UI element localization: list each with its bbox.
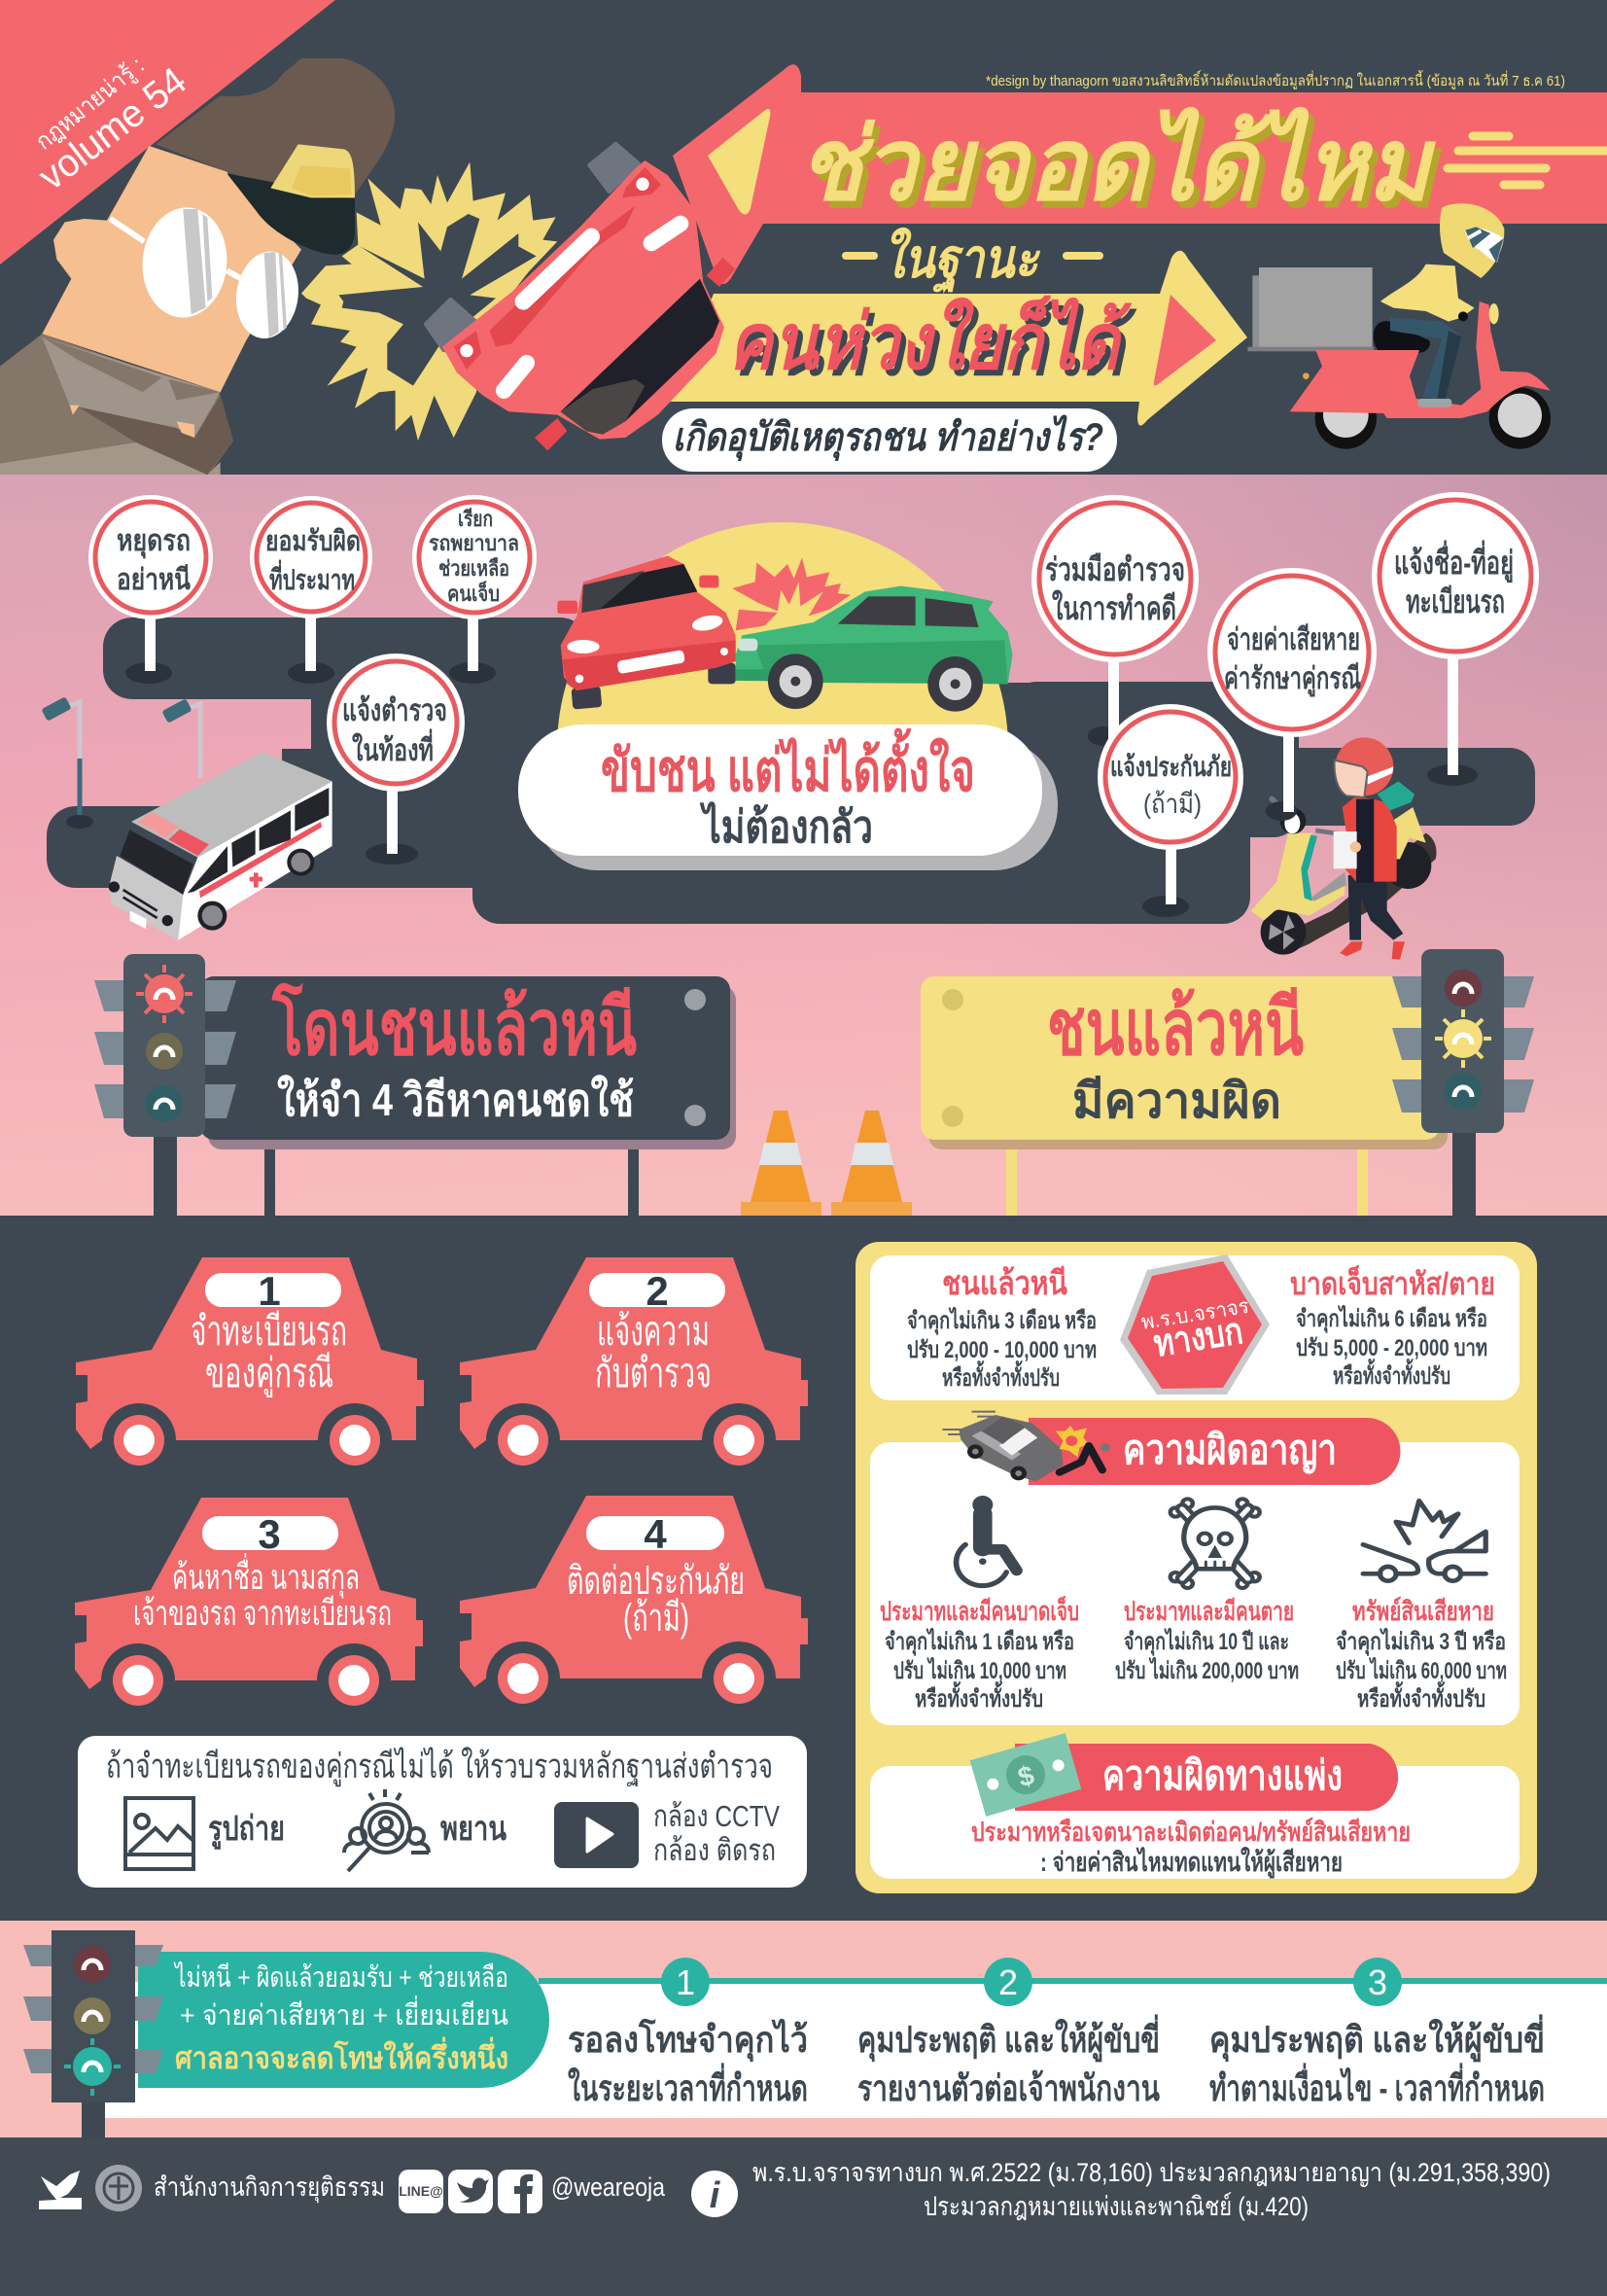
car card 2 bbox=[460, 1257, 808, 1466]
title line 1: ช่วยจอดได้ไหม bbox=[798, 106, 1436, 222]
banner: civil offence: ความผิดทางแพ่ง bbox=[1102, 1752, 1343, 1798]
column: injured: จำคุกไม่เกิน 1 เดือน หรือ bbox=[885, 1627, 1074, 1657]
step 2: รายงานตัวต่อเจ้าพนักงาน bbox=[857, 2068, 1160, 2108]
signboard: hit and run is wrong bbox=[921, 976, 1448, 1216]
hexagon sign bbox=[1120, 1254, 1270, 1395]
evidence box bbox=[78, 1736, 807, 1888]
label: cameras: กล้อง CCTV bbox=[653, 1799, 780, 1833]
signpost: notify local police bbox=[327, 653, 465, 865]
signboard: hit and fled from you bbox=[200, 976, 736, 1216]
signpost: stop do not flee: หยุดรถ bbox=[117, 525, 191, 559]
panel: land traffic act: ชนแล้วหนี bbox=[942, 1265, 1067, 1302]
signboard: hit and fled from you: โดนชนแล้วหนี bbox=[271, 981, 637, 1071]
signpost: call ambulance: เรียก bbox=[458, 507, 493, 531]
icon: seal bbox=[95, 2165, 142, 2211]
signpost: notify insurance bbox=[1098, 704, 1243, 917]
label: cameras bbox=[653, 1799, 780, 1867]
label: cameras: กล้อง ติดรถ bbox=[653, 1833, 776, 1867]
step 3: 3 bbox=[1368, 1962, 1387, 2002]
signpost: admit fault bbox=[250, 496, 372, 684]
car card 4: 4 bbox=[644, 1511, 667, 1557]
signpost: give name and address bbox=[1372, 492, 1539, 786]
signpost: admit fault: ที่ประมาท bbox=[269, 559, 355, 596]
signpost: notify insurance: แจ้งประกันภัย bbox=[1110, 752, 1232, 782]
column: death bbox=[1115, 1597, 1299, 1684]
car card 4: (ถ้ามี) bbox=[623, 1597, 689, 1640]
headline arrow: yellow bbox=[668, 251, 1247, 426]
icon: Facebook bbox=[498, 2170, 542, 2213]
car card 1: ของคู่กรณี bbox=[205, 1350, 333, 1397]
question pill: เกิดอุบัติเหตุรถชน ทำอย่างไร? bbox=[673, 414, 1103, 462]
arrow inner triangle bbox=[708, 109, 770, 215]
volume corner banner: กฎหมายน่ารู้ : bbox=[31, 53, 150, 156]
column: injured: ปรับ ไม่เกิน 10,000 บาท bbox=[893, 1656, 1066, 1684]
signpost: call ambulance: รถพยาบาล bbox=[429, 531, 519, 555]
car card 3 bbox=[75, 1498, 423, 1706]
signpost: cooperate with police: ร่วมมือตำรวจ bbox=[1045, 551, 1185, 587]
icon: dove logo bbox=[39, 2171, 82, 2209]
car card 1: จำทะเบียนรถ bbox=[191, 1308, 347, 1354]
pill: hit without intent: ไม่ต้องกลัว bbox=[699, 801, 873, 852]
panel: civil offence bbox=[870, 1733, 1520, 1879]
column: property damage: หรือทั้งจำทั้งปรับ bbox=[1357, 1680, 1485, 1713]
icon: Twitter bbox=[448, 2170, 493, 2213]
panel: land traffic act: ปรับ 2,000 - 10,000 บาท bbox=[907, 1337, 1097, 1363]
banner: criminal offence: ความผิดอาญา bbox=[1123, 1427, 1337, 1474]
step 2: คุมประพฤติ และให้ผู้ขับขี่ bbox=[857, 2014, 1160, 2063]
illustration: street lamps bbox=[41, 696, 200, 829]
step 3 bbox=[1209, 1958, 1545, 2108]
car card 2: กับตำรวจ bbox=[595, 1350, 712, 1395]
evidence box: ถ้าจำทะเบียนรถของคู่กรณีไม่ได้ ให้รวบรวมหลักฐานส่งตำรวจ bbox=[106, 1747, 773, 1786]
signpost: give name and address: ทะเบียนรถ bbox=[1406, 583, 1505, 619]
headline arrow: red bbox=[673, 64, 1607, 284]
teal pill: ไม่หนี + ผิดแล้วยอมรับ + ช่วยเหลือ bbox=[173, 1960, 508, 1994]
signpost: cooperate with police: ในการทำคดี bbox=[1052, 589, 1176, 626]
signboard: hit and run is wrong: มีความผิด bbox=[1072, 1074, 1281, 1128]
panel: civil offence: : จ่ายค่าสินไหมทดแทนให้ผู้เสียหาย bbox=[1040, 1847, 1343, 1879]
signpost: cooperate with police bbox=[1031, 495, 1199, 746]
teal pill: + จ่ายค่าเสียหาย + เยี่ยมเยียน bbox=[180, 1996, 508, 2031]
icon: crash bbox=[1363, 1501, 1485, 1581]
signpost: stop do not flee bbox=[88, 495, 213, 684]
icon: car hitting pedestrian bbox=[942, 1412, 1110, 1481]
car card 1 bbox=[76, 1257, 424, 1466]
car card 4: ติดต่อประกันภัย bbox=[567, 1560, 745, 1603]
icon: banknote bbox=[970, 1733, 1081, 1817]
car card 3: 3 bbox=[258, 1511, 281, 1557]
speed lines bbox=[1448, 136, 1607, 185]
column: property damage: จำคุกไม่เกิน 3 ปี หรือ bbox=[1336, 1627, 1506, 1657]
icon: LINE: LINE@ bbox=[399, 2183, 443, 2199]
icon: wheelchair bbox=[957, 1496, 1017, 1586]
volume corner banner bbox=[0, 0, 335, 265]
traffic light: left red bbox=[94, 954, 236, 1216]
volume corner banner: volume 54 bbox=[31, 59, 194, 198]
icon: video play bbox=[554, 1802, 639, 1868]
signpost: admit fault: ยอมรับผิด bbox=[265, 526, 361, 557]
bottom band: sentence reduction bbox=[0, 1921, 1607, 2159]
traffic light: green bbox=[23, 1930, 163, 2159]
traffic light: right yellow bbox=[1392, 949, 1534, 1216]
step 2 bbox=[857, 1958, 1160, 2108]
signpost: call ambulance: คนเจ็บ bbox=[447, 580, 500, 606]
panel: land traffic act: จำคุกไม่เกิน 6 เดือน หรือ bbox=[1296, 1304, 1487, 1334]
arrow inner red triangle bbox=[1154, 295, 1216, 385]
car card 2: แจ้งความ bbox=[597, 1308, 710, 1354]
column: death: ปรับ ไม่เกิน 200,000 บาท bbox=[1115, 1656, 1299, 1684]
hexagon sign: พ.ร.บ.จราจร bbox=[1139, 1295, 1250, 1334]
icon: witness magnifier bbox=[344, 1789, 429, 1871]
organisation name: สำนักงานกิจการยุติธรรม bbox=[154, 2172, 385, 2204]
signpost: call ambulance bbox=[412, 495, 537, 684]
panel: civil offence: ประมาทหรือเจตนาละเมิดต่อคน/ทรัพย์สินเสียหาย bbox=[971, 1817, 1411, 1847]
illustration: man with glasses bbox=[0, 58, 395, 477]
icon: info: i bbox=[710, 2175, 721, 2216]
signpost: stop do not flee: อย่าหนี bbox=[117, 564, 191, 596]
panel: land traffic act bbox=[870, 1254, 1520, 1400]
column: property damage: ทรัพย์สินเสียหาย bbox=[1352, 1596, 1494, 1626]
signpost: call ambulance: ช่วยเหลือ bbox=[438, 556, 509, 581]
panel: penalties bbox=[856, 1242, 1537, 1893]
signpost: pay damages: ค่ารักษาคู่กรณี bbox=[1224, 661, 1361, 697]
step 1: รอลงโทษจำคุกไว้ bbox=[568, 2018, 808, 2063]
panel: land traffic act: หรือทั้งจำทั้งปรับ bbox=[942, 1360, 1060, 1392]
signboard: hit and fled from you: ให้จำ 4 วิธีหาคนชดใช้ bbox=[277, 1074, 634, 1125]
title line 1 shadow: ช่วยจอดได้ไหม bbox=[804, 113, 1442, 229]
panel: criminal offence bbox=[870, 1412, 1520, 1725]
teal pill bbox=[138, 1952, 549, 2088]
pill: hit without intent bbox=[518, 724, 1058, 870]
column: death: ประมาทและมีคนตาย bbox=[1124, 1597, 1294, 1626]
hexagon sign: ทางบก bbox=[1151, 1311, 1245, 1365]
social handle: @weareoja bbox=[551, 2172, 666, 2202]
question pill bbox=[662, 408, 1117, 472]
pink road section background bbox=[0, 475, 1607, 1216]
panel: land traffic act: หรือทั้งจำทั้งปรับ bbox=[1333, 1358, 1450, 1390]
explosion bbox=[732, 557, 851, 616]
column: injured bbox=[880, 1594, 1079, 1713]
signboard: hit and run is wrong: ชนแล้วหนี bbox=[1047, 984, 1304, 1071]
header background bbox=[0, 0, 1607, 475]
column: property damage: ปรับ ไม่เกิน 60,000 บาท bbox=[1336, 1656, 1507, 1684]
step 1 bbox=[568, 1958, 808, 2108]
panel: land traffic act: ปรับ 5,000 - 20,000 บาท bbox=[1296, 1335, 1487, 1361]
legal references: ประมวลกฎหมายแพ่งและพาณิชย์ (ม.420) bbox=[924, 2191, 1309, 2221]
signpost: notify local police: แจ้งตำรวจ bbox=[342, 693, 447, 727]
step 3: คุมประพฤติ และให้ผู้ขับขี่ bbox=[1209, 2014, 1545, 2063]
subtitle: in the role of bbox=[842, 227, 1103, 294]
illustration: yellow crash burst bbox=[301, 162, 557, 441]
column: property damage bbox=[1336, 1596, 1507, 1713]
step 1: ในระยะเวลาที่กำหนด bbox=[568, 2063, 808, 2108]
icon: photo bbox=[125, 1798, 193, 1869]
illustration: yellow sun bbox=[557, 522, 1008, 759]
legal references bbox=[752, 2158, 1551, 2221]
banner: criminal offence bbox=[1029, 1418, 1400, 1485]
column: injured: ประมาทและมีคนบาดเจ็บ bbox=[880, 1594, 1079, 1626]
column: injured: หรือทั้งจำทั้งปรับ bbox=[915, 1680, 1043, 1713]
illustration: ambulance bbox=[109, 752, 332, 940]
icon: LINE bbox=[399, 2170, 443, 2213]
icon: banknote: $ bbox=[1015, 1759, 1038, 1792]
car card 3: ค้นหาชื่อ นามสกุล bbox=[172, 1553, 360, 1599]
step 2: 2 bbox=[998, 1962, 1018, 2002]
car card 2: 2 bbox=[646, 1268, 669, 1314]
column: death: จำคุกไม่เกิน 10 ปี และ bbox=[1124, 1627, 1289, 1657]
footer bbox=[0, 2137, 1607, 2296]
illustration: courier with yellow scooter bbox=[1251, 737, 1437, 960]
car card 3: เจ้าของรถ จากทะเบียนรถ bbox=[133, 1593, 392, 1633]
pill: hit without intent: ขับชน แต่ไม่ได้ตั้งใจ bbox=[601, 727, 975, 803]
dark section background bbox=[0, 1216, 1607, 1921]
signpost: pay damages: จ่ายค่าเสียหาย bbox=[1227, 622, 1360, 656]
road bbox=[47, 618, 1535, 924]
signpost: pay damages bbox=[1207, 568, 1377, 821]
title line 2 shadow: คนห่วงใยก็ได้ bbox=[733, 300, 1137, 391]
panel: land traffic act: จำคุกไม่เกิน 3 เดือน หรือ bbox=[907, 1306, 1097, 1336]
car card 1: 1 bbox=[258, 1268, 281, 1314]
signpost: give name and address: แจ้งชื่อ-ที่อยู่ bbox=[1394, 540, 1514, 583]
panel: land traffic act: บาดเจ็บสาหัส/ตาย bbox=[1290, 1264, 1495, 1301]
step 1: 1 bbox=[676, 1962, 695, 2002]
signpost: notify insurance: (ถ้ามี) bbox=[1143, 789, 1202, 819]
icon: skull and crossbones bbox=[1170, 1499, 1260, 1588]
icon: info bbox=[691, 2171, 738, 2217]
illustration: collision cars bbox=[557, 556, 1013, 712]
signpost: notify local police: ในท้องที่ bbox=[352, 728, 434, 767]
title line 2: คนห่วงใยก็ได้ bbox=[728, 295, 1133, 385]
car card 4 bbox=[460, 1496, 808, 1704]
label: photo: รูปถ่าย bbox=[208, 1810, 285, 1850]
subtitle: in the role of: ในฐานะ bbox=[883, 227, 1040, 294]
illustration: overturned red car bbox=[426, 144, 736, 450]
illustration: delivery scooter rider bbox=[1247, 203, 1551, 449]
banner: civil offence bbox=[1015, 1744, 1398, 1811]
label: witness: พยาน bbox=[440, 1810, 507, 1848]
teal pill: ศาลอาจจะลดโทษให้ครึ่งหนึ่ง bbox=[175, 2036, 508, 2075]
traffic cones bbox=[741, 1111, 912, 1216]
